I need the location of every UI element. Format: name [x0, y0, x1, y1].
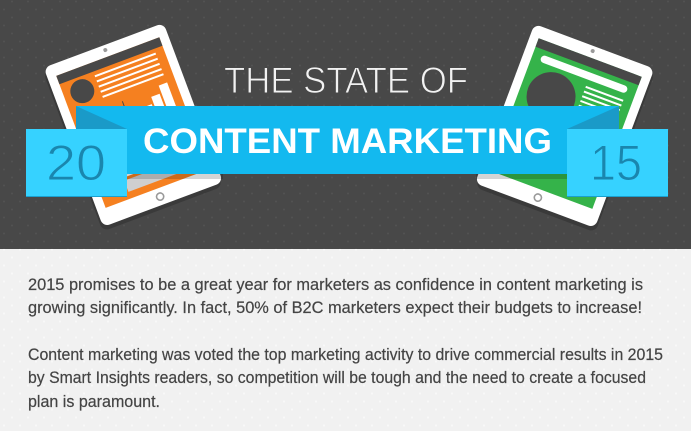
- second paragraph: [28, 346, 663, 411]
- icon: green tablet: [474, 24, 656, 232]
- title: the state of: THE STATE OF: [224, 59, 468, 101]
- year tab: 15: [567, 129, 668, 197]
- second paragraph: plan is paramount.: [28, 393, 160, 411]
- second paragraph: by Smart Insights readers, so competition will be tough and the need to create a focused: [28, 369, 646, 387]
- year tab: 20: 20: [46, 135, 106, 191]
- intro paragraph: 2015 promises to be a great year for marketers as confidence in content marketing is: [28, 276, 643, 294]
- banner ribbon: [76, 106, 619, 174]
- body background: [0, 249, 691, 431]
- second paragraph: Content marketing was voted the top marketing activity to drive commercial results in 2015: [28, 346, 663, 364]
- intro paragraph: growing significantly. In fact, 50% of B2C marketers expect their budgets to increase!: [28, 299, 642, 317]
- heading: content marketing: CONTENT MARKETING: [143, 121, 552, 161]
- header background: [0, 0, 691, 249]
- year tab: 15: 15: [590, 135, 642, 191]
- intro paragraph: [28, 276, 643, 317]
- icon: orange tablet: [42, 23, 224, 231]
- year tab: 20: [26, 129, 127, 197]
- ribbon shadow: [127, 174, 568, 179]
